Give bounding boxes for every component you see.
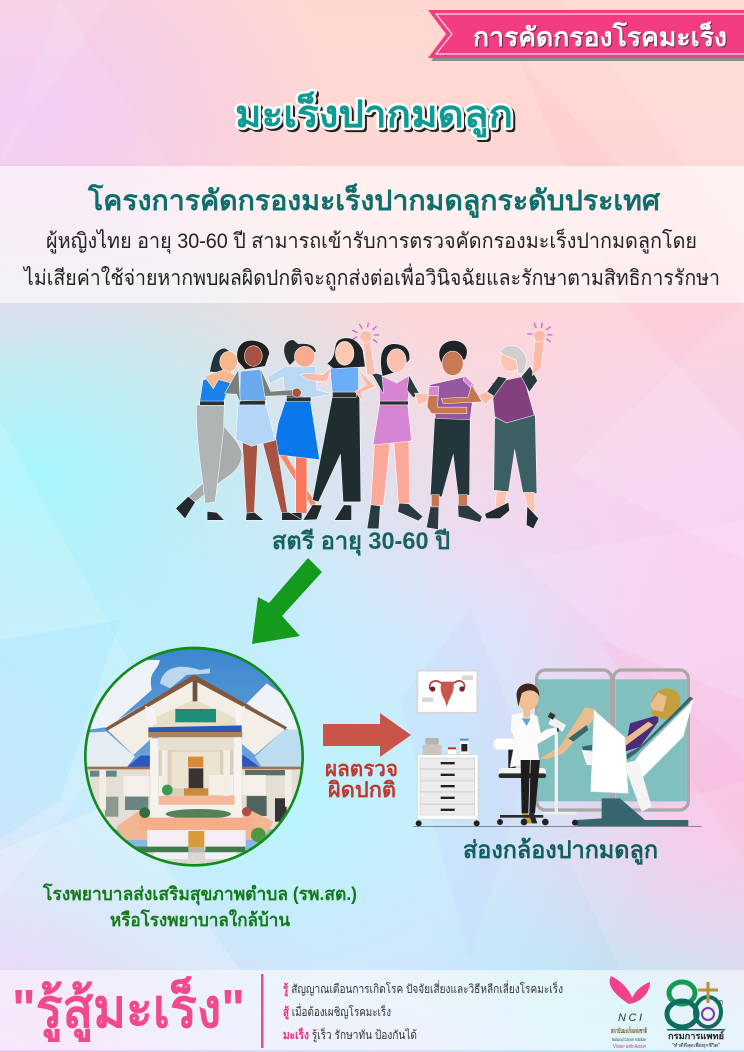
logo: Department of Medical Services 80 years: ปี <box>718 999 723 1007</box>
wall chart: uterus <box>417 671 477 713</box>
arrow: red right <box>323 713 411 757</box>
logo: Department of Medical Services 80 years: "ทำดีที่สุดเพื่อทุกชีวิต" <box>672 1042 720 1049</box>
privacy screen <box>537 670 688 810</box>
ribbon header <box>428 10 744 61</box>
porch <box>159 737 233 751</box>
side wings roofs <box>85 732 135 767</box>
label: hospital: โรงพยาบาลส่งเสริมสุขภาพตำบล (รพ.สต.) <box>42 883 357 906</box>
logo: National Cancer Institute: National Cancer Institute <box>612 1037 646 1042</box>
clouds <box>87 660 160 730</box>
logo: National Cancer Institute <box>610 976 650 1050</box>
illustration: group of women <box>176 323 553 529</box>
body text line 1: ผู้หญิงไทย อายุ 30-60 ปี สามารถเข้ารับการตรวจคัดกรองมะเร็งปากมดลูกโดย <box>46 227 697 254</box>
woman 5 <box>360 331 428 529</box>
footer line 3: มะเร็ง รู้เร็ว รักษาทัน ป้องกันได้ <box>283 1027 417 1043</box>
label: women aged 30-60: สตรี อายุ 30-60 ปี <box>272 528 450 557</box>
panel: intro band <box>0 166 744 303</box>
label: abnormal result: ผิดปกติ <box>327 779 396 802</box>
doctor <box>494 684 557 825</box>
main gable <box>105 675 287 755</box>
label: abnormal result: ผลตรวจ <box>325 758 398 781</box>
arrow: green down-left <box>252 558 322 644</box>
logo: National Cancer Institute: สถาบันมะเร็งแห่งชาติ <box>611 1026 647 1035</box>
label: hospital: หรือโรงพยาบาลใกล้บ้าน <box>110 909 291 930</box>
woman 7 <box>478 330 545 528</box>
exam chair <box>577 697 693 826</box>
label: hospital <box>42 883 357 930</box>
woman 2 <box>225 341 302 520</box>
woman 6 <box>427 341 482 529</box>
title: มะเร็งปากมดลูก <box>235 91 513 138</box>
woman 3 <box>268 340 332 520</box>
colposcope <box>543 712 578 826</box>
woman 1 <box>176 348 242 520</box>
label: abnormal result <box>325 758 398 802</box>
logo: National Cancer Institute: NCI <box>618 1012 642 1024</box>
panel: footer band <box>0 970 744 1050</box>
footer line 2: สู้ เมื่อต้องเผชิญโรคมะเร็ง <box>283 1003 391 1020</box>
sparks <box>352 323 553 343</box>
illustration: colposcopy exam <box>413 670 702 827</box>
patient <box>540 688 680 793</box>
photo: health centre in circle <box>83 647 304 867</box>
subtitle: โครงการคัดกรองมะเร็งปากมดลูกระดับประเทศ <box>87 183 661 218</box>
logo: National Cancer Institute: Vision with Action <box>613 1044 646 1050</box>
ribbon text: การคัดกรองโรคมะเร็ง <box>473 21 727 52</box>
footer line 1: รู้ สัญญาณเตือนการเกิดโรค ปัจจัยเสี่ยงและวิธีหลีกเลี่ยงโรคมะเร็ง <box>283 980 563 997</box>
slogan: "รู้สู้มะเร็ง" <box>12 977 245 1042</box>
floor line <box>413 825 702 828</box>
logo: Department of Medical Services 80 years: กรมการแพทย์ <box>668 1030 724 1041</box>
logo: Department of Medical Services 80 years <box>667 982 725 1049</box>
woman 4 <box>301 338 375 520</box>
label: colposcopy: ส่องกล้องปากมดลูก <box>463 837 658 865</box>
cabinet <box>416 738 480 826</box>
